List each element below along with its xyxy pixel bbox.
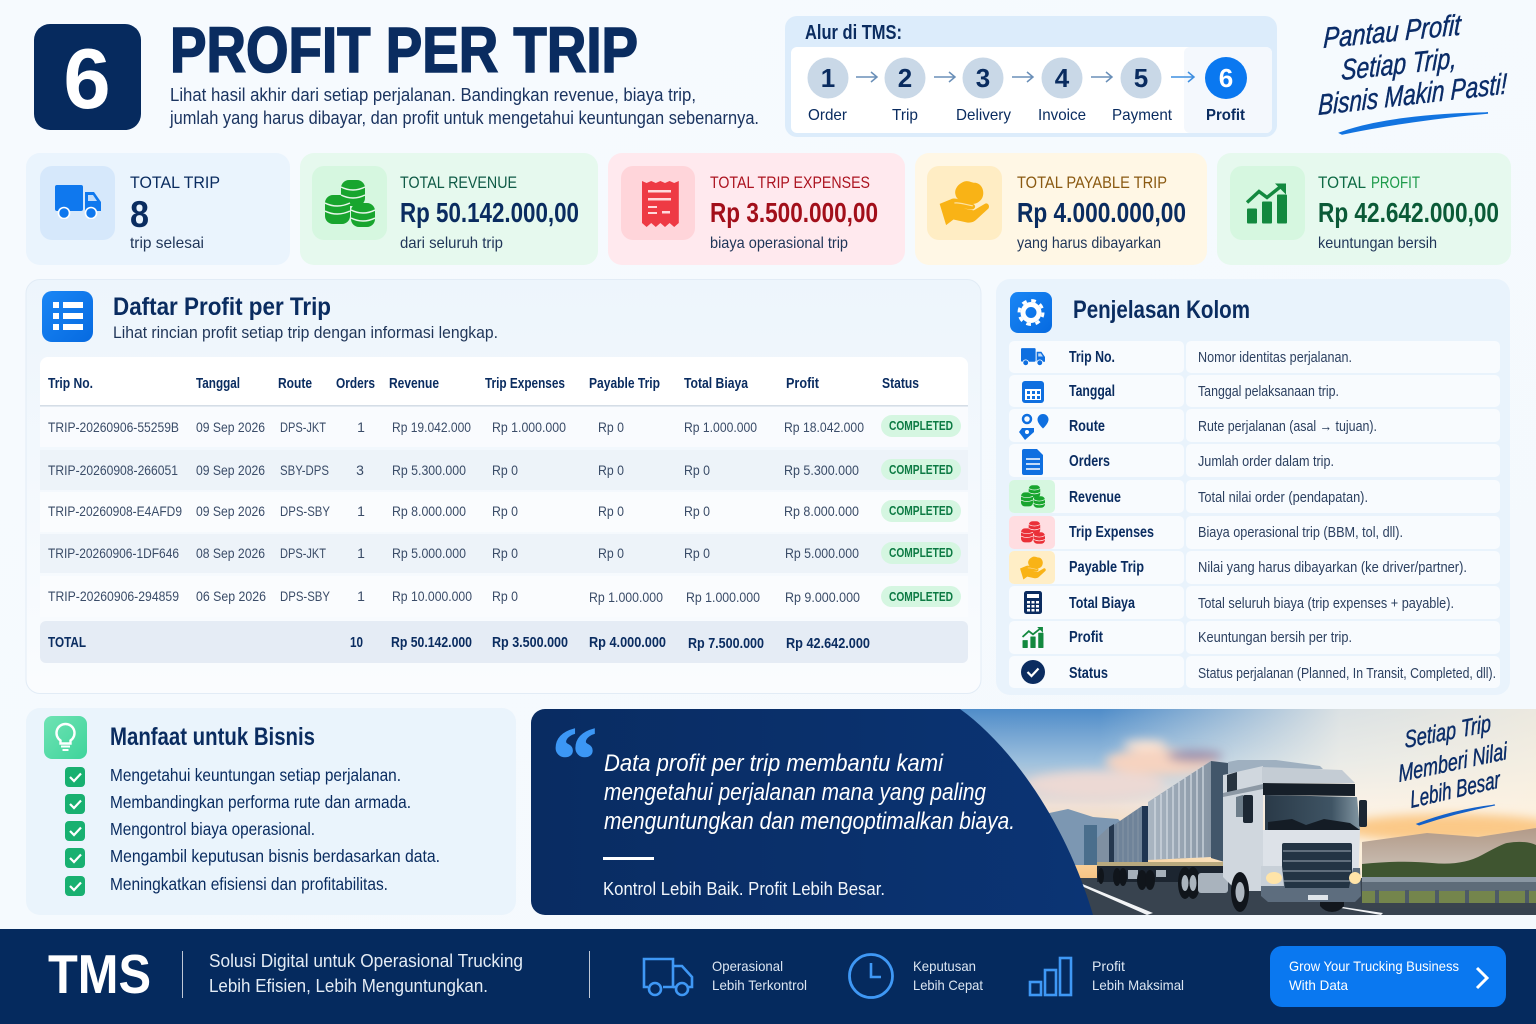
flow steps: Profit [1206,107,1246,124]
flow steps: 1 [821,63,835,93]
table row 1: DPS-JKT [280,419,326,435]
icon: coins [325,180,375,227]
title: PROFIT PER TRIP [170,14,638,86]
footer item: operasional [644,958,807,995]
icon: list [42,291,93,342]
quote text: Data profit per trip membantu kami [604,750,944,777]
quote text: menguntungkan dan mengoptimalkan biaya. [604,808,1015,835]
stat card: total revenue: dari seluruh trip [400,235,503,252]
icon: truck [55,185,101,218]
table row 4: COMPLETED [889,546,953,560]
stat card: total trip: TOTAL TRIP [130,173,220,192]
table row 1: Rp 1.000.000 [492,419,566,435]
footer [0,929,1536,1024]
table heading: Daftar Profit per Trip [113,293,331,321]
row: Profit: Keuntungan bersih per trip. [1198,629,1352,646]
flow steps: 2 [898,63,912,93]
table row 2: Rp 5.300.000 [784,462,859,478]
benefits heading: Manfaat untuk Bisnis [110,723,315,751]
stat card: total trip expenses [608,153,905,265]
table row 3: Rp 8.000.000 [784,503,859,519]
handwritten slogan: Setiap Trip, [1341,43,1457,87]
benefits checklist: Meningkatkan efisiensi dan profitabilitas. [110,874,388,894]
table row 1: 09 Sep 2026 [196,419,265,435]
table row 2: Rp 0 [492,462,518,478]
row: Trip No. [1021,348,1352,366]
row: Trip No.: Trip No. [1069,349,1115,366]
quote tagline: Kontrol Lebih Baik. Profit Lebih Besar. [603,879,885,899]
flow steps: Delivery [956,107,1011,124]
table header row: Trip Expenses [485,376,565,392]
table row 1: COMPLETED [889,419,953,433]
stat card: total trip [26,153,290,265]
row: Revenue [1021,485,1368,508]
flow steps: 6 [1219,63,1233,93]
row: Revenue: Revenue [1069,489,1121,506]
footer call to action button [1270,946,1506,1007]
stat card: total profit [1217,153,1511,265]
benefits checklist: Mengambil keputusan bisnis berdasarkan data. [110,846,440,866]
table row 3: 09 Sep 2026 [196,503,265,519]
flow steps: Trip [892,107,918,124]
table row 3: Rp 8.000.000 [392,503,466,519]
stat card: total revenue: Rp 50.142.000,00 [400,197,579,228]
footer tagline: Solusi Digital untuk Operasional Trucking [209,950,523,971]
row: Payable Trip: Payable Trip [1069,559,1144,576]
benefits checklist: Mengetahui keuntungan setiap perjalanan. [110,765,401,785]
stat card: total payable trip: yang harus dibayarkan [1017,235,1161,252]
stat card: total payable trip: TOTAL PAYABLE TRIP [1017,173,1167,192]
quote text: mengetahui perjalanan mana yang paling [604,779,987,806]
row: Trip Expenses: Biaya operasional trip (BBM, tol, dll). [1198,524,1403,541]
table row 5: Rp 1.000.000 [589,589,663,605]
stat card: total payable trip [915,153,1207,265]
table row 5: 06 Sep 2026 [196,588,266,604]
table row 1: TRIP-20260906-55259B [48,419,179,435]
handwritten note on photo [1398,710,1508,825]
stat card: total profit: PROFIT [1371,173,1420,192]
subtitle [169,85,759,128]
table row 2: 3 [356,462,364,478]
table header row: Orders [336,376,375,392]
row: Payable Trip [1020,557,1467,580]
stat card: total revenue: TOTAL REVENUE [400,173,517,192]
icon: light bulb [44,716,87,759]
handwritten note on photo: Lebih Besar [1409,766,1502,814]
table row 2: SBY-DPS [280,462,329,478]
table row 1: 1 [357,419,365,435]
table total row: TOTAL [48,635,86,651]
footer logo: TMS [48,943,151,1005]
stat card: total trip expenses: Rp 3.500.000,00 [710,197,878,228]
table row 2: Rp 0 [598,462,624,478]
benefits checklist: Mengontrol biaya operasional. [110,819,315,839]
table header row [48,376,919,392]
table row 3: Rp 0 [598,503,624,519]
row: Trip Expenses [1021,521,1403,544]
table header row: Tanggal [196,376,240,392]
table row 4: Rp 5.000.000 [785,545,859,561]
row: Tanggal: Tanggal pelaksanaan trip. [1198,383,1339,400]
flow steps: Invoice [1038,107,1086,124]
table row 4: 1 [357,545,365,561]
row: Total Biaya: Total Biaya [1069,595,1135,612]
table row 1 [48,415,961,437]
row: Trip Expenses: Trip Expenses [1069,524,1154,541]
row: Orders: Orders [1069,453,1110,470]
table row 5: COMPLETED [889,590,953,604]
table header row: Status [882,376,919,392]
step number badge: 6 [63,32,111,127]
table total row: Rp 50.142.000 [391,635,472,651]
table row 3 [48,500,961,522]
row: Total Biaya [1024,591,1454,614]
panel: business benefits [26,708,516,915]
flow steps: 3 [976,63,990,93]
table row 3: DPS-SBY [280,503,331,519]
table row 5: TRIP-20260906-294859 [48,588,179,604]
quote text [604,750,1015,835]
table header row: Total Biaya [684,376,749,392]
table row 4: Rp 5.000.000 [392,545,466,561]
handwritten slogan: Pantau Profit [1323,10,1463,55]
flow steps: 4 [1055,63,1070,93]
flow arrows [856,72,1194,82]
table row 3: 1 [357,503,365,519]
icon: growth chart [1247,184,1287,224]
table row 5: Rp 10.000.000 [392,588,472,604]
benefits checklist: Membandingkan performa rute dan armada. [110,792,411,812]
footer call to action button: With Data [1289,977,1348,993]
table row 3: Rp 0 [492,503,518,519]
footer item: profit: Profit [1092,958,1125,974]
stat card: total profit: keuntungan bersih [1318,235,1437,252]
table row 4 [48,542,961,564]
row: Trip No.: Nomor identitas perjalanan. [1198,349,1352,366]
table header row: Trip No. [48,376,93,392]
table header row: Revenue [389,376,439,392]
stat card: total payable trip: Rp 4.000.000,00 [1017,197,1186,228]
table total row: Rp 3.500.000 [492,635,568,651]
row: Revenue: Total nilai order (pendapatan). [1198,489,1368,506]
table row 4: Rp 0 [684,545,710,561]
panel: quote banner with truck photo [531,709,1536,915]
stat card: total trip expenses: TOTAL TRIP EXPENSES [710,173,870,192]
row: Profit: Profit [1069,629,1103,646]
stat card: total trip expenses: biaya operasional trip [710,235,848,252]
stat card: total profit: TOTAL [1318,173,1366,192]
table [40,357,968,663]
flow heading: Alur di TMS: [805,22,902,44]
flow steps: 5 [1134,63,1148,93]
table row 5 [48,586,961,607]
footer item: keputusan [850,954,983,998]
table row 4: TRIP-20260906-1DF646 [48,545,179,561]
flow steps [808,57,1247,124]
table total row: Rp 7.500.000 [688,636,764,652]
row: Route: Route [1069,418,1105,435]
illustration: highway truck scene [940,709,1536,915]
panel: TMS flow [785,16,1277,137]
icon: gear [1010,292,1052,333]
table total row: Rp 42.642.000 [786,636,870,652]
panel: column explanation [996,279,1510,695]
footer item: keputusan: Lebih Cepat [913,977,983,993]
handwritten slogan [1318,10,1507,134]
navy quote shape [531,709,1093,915]
table row 4: DPS-JKT [280,545,326,561]
trailers [1097,761,1228,899]
stat card: total trip: 8 [130,194,149,235]
table row 5: Rp 9.000.000 [785,589,860,605]
table total row: Rp 4.000.000 [589,635,666,651]
row: Profit [1023,627,1352,648]
row: Tanggal: Tanggal [1069,383,1115,400]
footer item: profit: Lebih Maksimal [1092,977,1184,993]
table row 3: Rp 0 [684,503,710,519]
stat card: total trip: trip selesai [130,235,204,252]
table row 2: 09 Sep 2026 [196,462,265,478]
truck cab [1223,760,1367,912]
table total row [48,635,870,652]
row: Route [1019,414,1377,440]
table row 2: TRIP-20260908-266051 [48,462,178,478]
table row 4: Rp 0 [598,545,624,561]
table row 3: COMPLETED [889,504,953,518]
table total row: 10 [350,635,363,651]
row: Payable Trip: Nilai yang harus dibayarkan (ke driver/partner). [1198,559,1467,576]
explanation row cells [1009,341,1500,688]
footer item: operasional: Operasional [712,958,783,974]
step number badge [34,24,141,130]
table row 4: Rp 0 [492,545,518,561]
table row 2: COMPLETED [889,463,953,477]
icon: receipt [642,181,679,227]
row: Status: Status [1069,665,1108,682]
stat card: total profit: Rp 42.642.000,00 [1318,197,1499,228]
table row 1: Rp 0 [598,419,624,435]
footer item: profit [1030,958,1184,995]
row: Route: Rute perjalanan (asal → tujuan). [1198,418,1377,435]
subtitle: Lihat hasil akhir dari setiap perjalanan. Bandingkan revenue, biaya trip, [170,85,696,105]
footer tagline: Lebih Efisien, Lebih Menguntungkan. [209,975,488,996]
table row 1: Rp 1.000.000 [684,419,757,435]
table row 3: TRIP-20260908-E4AFD9 [48,503,182,519]
footer tagline [182,950,590,998]
table row 2: Rp 0 [684,462,710,478]
flow steps: Payment [1112,107,1173,124]
stat card: total revenue [300,153,598,265]
table row 5: 1 [357,588,365,604]
footer item: keputusan: Keputusan [913,958,976,974]
row: Total Biaya: Total seluruh biaya (trip expenses + payable). [1198,595,1454,612]
benefits checklist [65,765,440,896]
table row 5: Rp 0 [492,588,518,604]
footer item: operasional: Lebih Terkontrol [712,977,807,993]
table row 1: Rp 19.042.000 [392,419,471,435]
row: Status [1021,660,1496,684]
quote mark: “ [552,710,597,809]
panel: profit table [26,280,981,694]
table header row: Payable Trip [589,376,660,392]
footer call to action button: Grow Your Trucking Business [1289,958,1459,974]
table row 1: Rp 18.042.000 [784,419,864,435]
table header row: Route [278,376,312,392]
table row 4: 08 Sep 2026 [196,545,265,561]
flow steps: Order [808,107,848,124]
row: Orders [1022,449,1334,475]
table row 2: Rp 5.300.000 [392,462,466,478]
icon: hand holding coin [940,181,989,225]
table header row: Profit [786,376,819,392]
handwritten note on photo: Setiap Trip [1404,710,1492,754]
explanation heading: Penjelasan Kolom [1073,296,1250,324]
row: Tanggal [1022,381,1339,403]
table row 5: Rp 1.000.000 [686,589,760,605]
table row 5: DPS-SBY [280,588,331,604]
row: Orders: Jumlah order dalam trip. [1198,453,1334,470]
table subheading: Lihat rincian profit setiap trip dengan informasi lengkap. [113,323,498,342]
subtitle: jumlah yang harus dibayar, dan profit untuk mengetahui keuntungan sebenarnya. [169,108,759,128]
table row 2 [48,459,961,480]
quote divider [603,857,654,860]
